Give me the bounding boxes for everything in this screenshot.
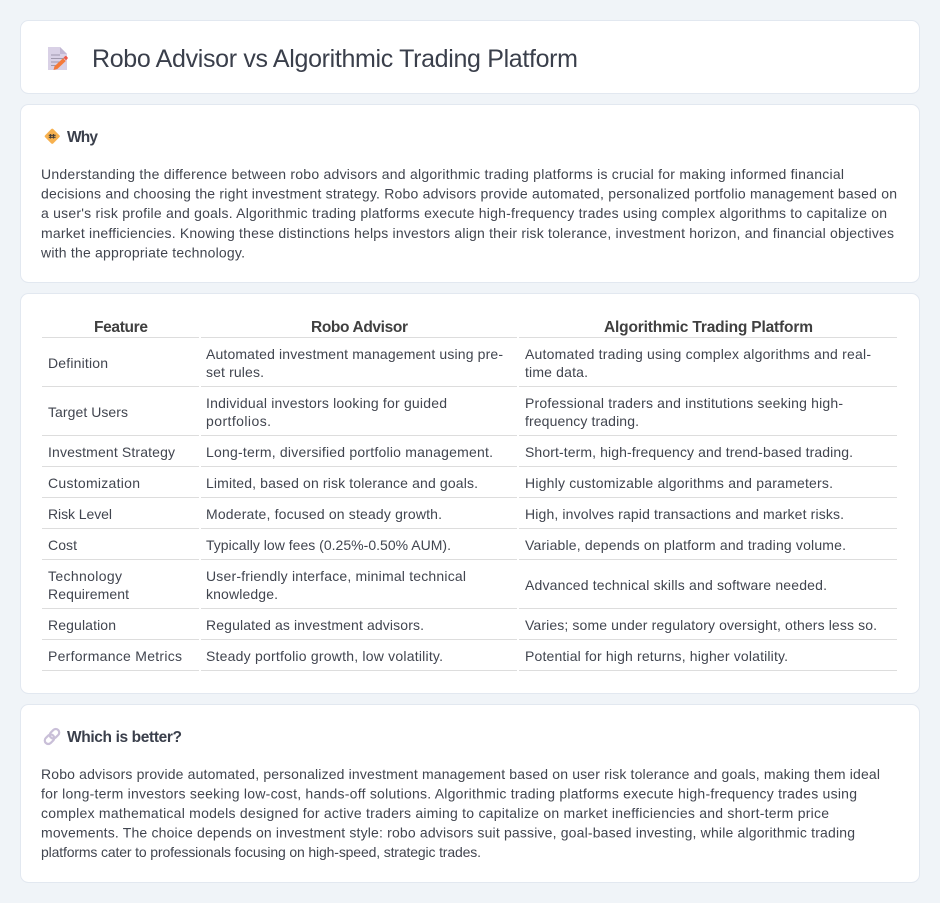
heading: why: Why [67, 129, 98, 146]
row: target users: Individual investors looking for guided [206, 395, 447, 411]
row: target users: Professional traders and institutions seeking high- [525, 395, 843, 411]
row: risk level: High, involves rapid transactions and market risks. [525, 506, 844, 522]
row: performance metrics: Steady portfolio growth, low volatility. [206, 648, 443, 664]
row: definition: Definition [48, 355, 108, 371]
row: customization: Limited, based on risk tolerance and goals. [206, 475, 478, 491]
text block: why paragraph: Understanding the difference between robo advisors and algorithmic trading platforms is crucial for making informed financial [41, 166, 844, 182]
text block: why paragraph: a user's risk profile and goals. Algorithmic trading platforms execute high-frequency trades using complex algorithms to capitalize on [41, 205, 887, 221]
row: target users: portfolios. [206, 413, 271, 429]
table header row [42, 319, 897, 338]
row: regulation: Regulation [48, 617, 116, 633]
row: investment strategy: Long-term, diversified portfolio management. [206, 444, 493, 460]
row: investment strategy: Short-term, high-frequency and trend-based trading. [525, 444, 853, 460]
row: investment strategy: Investment Strategy [48, 444, 175, 460]
row: technology requirement: User-friendly interface, minimal technical [206, 568, 466, 584]
row: technology requirement [42, 568, 897, 609]
table header row: Feature [94, 319, 148, 336]
text block: why paragraph: decisions and choosing the right investment strategy. Robo advisors provide automated, personalized portfolio management based on [41, 186, 897, 202]
text block: verdict paragraph: complex mathematical models designed for active traders aiming to capitalize on market inefficiencies and short-term price [41, 805, 829, 821]
icon: document with pencil [48, 47, 68, 70]
row: target users: Target Users [48, 404, 128, 420]
row: target users [42, 395, 897, 436]
row: performance metrics [42, 648, 897, 671]
table header row: Algorithmic Trading Platform [604, 319, 813, 336]
row: regulation: Varies; some under regulatory oversight, others less so. [525, 617, 877, 633]
row: customization [42, 475, 897, 498]
icon: chain link [43, 728, 61, 745]
panel: title header [20, 20, 920, 94]
heading: which is better: Which is better? [67, 729, 182, 746]
text block: verdict paragraph: Robo advisors provide automated, personalized investment management based on user risk tolerance and goals, making them ideal [41, 766, 880, 782]
row: technology requirement: Technology [48, 568, 122, 584]
row: performance metrics: Performance Metrics [48, 648, 182, 664]
icon: warning diamond [44, 128, 60, 144]
row: risk level: Moderate, focused on steady growth. [206, 506, 442, 522]
row: cost: Typically low fees (0.25%-0.50% AUM). [206, 537, 451, 553]
text block: why paragraph: with the appropriate technology. [40, 244, 245, 260]
text block: why paragraph: market inefficiencies. Knowing these distinctions helps investors align their risk tolerance, investment horizon, and financial objectives [41, 225, 894, 241]
row: investment strategy [42, 444, 897, 467]
row: technology requirement: Advanced technical skills and software needed. [525, 577, 827, 593]
panel: which is better [20, 704, 920, 882]
row: regulation: Regulated as investment advisors. [206, 617, 424, 633]
row: risk level: Risk Level [48, 506, 112, 522]
panel: comparison table [20, 294, 920, 694]
row: definition: set rules. [206, 364, 264, 380]
row: regulation [42, 617, 897, 640]
text block: verdict paragraph [41, 766, 880, 860]
row: technology requirement: Requirement [48, 586, 129, 602]
panel: why [20, 104, 920, 282]
row: definition [42, 346, 897, 387]
text block: verdict paragraph: platforms cater to professionals focusing on high-speed, strategic trades. [41, 844, 481, 860]
row: technology requirement: knowledge. [206, 586, 278, 602]
row: cost: Variable, depends on platform and trading volume. [525, 537, 846, 553]
row: definition: Automated trading using complex algorithms and real- [525, 346, 871, 362]
text block: verdict paragraph: movements. The choice depends on investment style: robo advisors suit passive, goal-based investing, while algorithmic trading [41, 824, 855, 840]
row: customization: Customization [48, 475, 140, 491]
row: definition: time data. [525, 364, 588, 380]
row: cost [42, 537, 897, 560]
table header row: Robo Advisor [311, 319, 408, 336]
row: risk level [42, 506, 897, 529]
row: performance metrics: Potential for high returns, higher volatility. [525, 648, 788, 664]
row: target users: frequency trading. [525, 413, 639, 429]
text block: why paragraph [40, 166, 897, 260]
row: cost: Cost [48, 537, 77, 553]
row: customization: Highly customizable algorithms and parameters. [525, 475, 833, 491]
text block: verdict paragraph: for long-term investors seeking low-cost, hands-off solutions. Algorithmic trading platforms execute high-frequency trades using [41, 786, 857, 802]
title: Robo Advisor vs Algorithmic Trading Platform [92, 45, 578, 73]
row: definition: Automated investment management using pre- [206, 346, 503, 362]
